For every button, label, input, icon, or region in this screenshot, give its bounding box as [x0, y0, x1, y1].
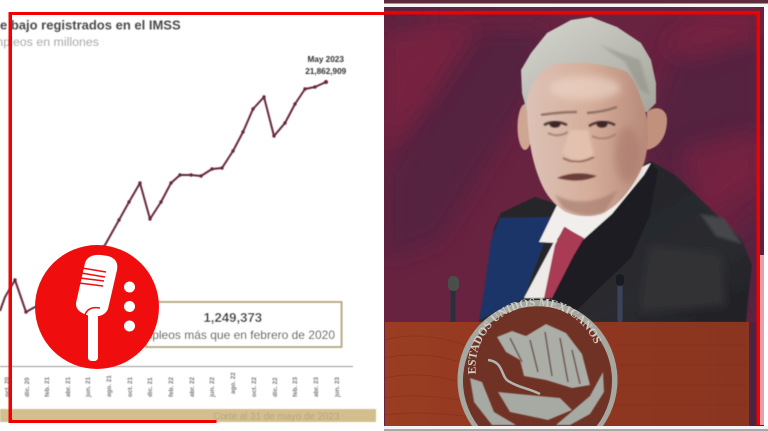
microphone left	[448, 276, 459, 322]
x axis: ago. 22	[230, 372, 237, 394]
panel: chart background	[0, 0, 384, 431]
x axis: feb. 23	[292, 377, 299, 397]
line chart	[0, 80, 328, 314]
wreath	[470, 372, 604, 425]
x axis: ago. 21	[106, 375, 113, 397]
x axis: oct. 22	[251, 377, 258, 397]
tie	[544, 227, 584, 298]
x axis: dic. 21	[147, 377, 154, 397]
cheek shade	[615, 127, 641, 183]
last point label: 21,862,909	[305, 67, 347, 76]
mouth	[557, 173, 597, 181]
dark lapel	[552, 163, 658, 312]
callout box	[136, 302, 342, 347]
eyes	[544, 121, 615, 128]
suit highlight	[700, 214, 742, 244]
x axis: dic. 20	[24, 377, 31, 397]
x axis	[0, 366, 353, 398]
x axis: abr. 21	[65, 377, 72, 397]
microphone right	[616, 274, 624, 322]
brows	[541, 107, 617, 115]
x axis: abr. 22	[189, 377, 196, 397]
x axis: jun. 22	[209, 377, 216, 398]
x axis: jun. 21	[85, 377, 92, 398]
right ear	[646, 108, 667, 150]
x axis: jun. 23	[334, 377, 341, 398]
eagle feather shading	[510, 332, 580, 384]
last point label	[305, 55, 347, 76]
left ear	[518, 104, 532, 150]
last point label: May 2023	[307, 55, 344, 64]
person	[479, 17, 752, 322]
nose	[562, 130, 594, 160]
suit	[479, 161, 752, 322]
serpent	[488, 360, 540, 394]
x axis: feb. 21	[44, 377, 51, 397]
x axis: oct. 21	[127, 377, 134, 397]
x axis: oct. 20	[4, 377, 11, 397]
mic grille	[79, 268, 106, 286]
hair shadow	[600, 45, 650, 95]
photo edges	[384, 0, 768, 431]
mic body	[76, 255, 117, 316]
chin shadow	[555, 190, 618, 215]
face	[527, 63, 648, 216]
footer band: Corte al 31 de mayo de 2023	[213, 412, 340, 422]
lectern	[385, 322, 749, 426]
footer band	[0, 409, 376, 422]
chart title: e bajo registrados en el IMSS	[0, 18, 181, 32]
callout box: 1,249,373	[203, 310, 262, 325]
icon: microphone badge	[35, 245, 159, 369]
mic handle	[88, 309, 98, 361]
seal: ESTADOS UNIDOS MEXICANOS	[468, 298, 602, 374]
blue lapel side	[479, 215, 554, 320]
panel: photo	[384, 0, 768, 431]
seal	[458, 298, 618, 426]
photo background	[384, 7, 768, 426]
shirt front	[524, 240, 570, 298]
x axis: abr. 23	[313, 377, 320, 397]
eagle	[497, 324, 590, 388]
callout box: empleos más que en febrero de 2020	[136, 328, 335, 342]
dark left shoulder	[498, 197, 555, 218]
collar	[539, 163, 651, 243]
x axis: feb. 22	[168, 377, 175, 397]
dots	[124, 282, 135, 332]
eye bags	[548, 132, 616, 139]
panel: chart	[0, 18, 376, 422]
suit sheen	[640, 245, 725, 312]
nose underside	[563, 157, 594, 162]
x axis: dic. 22	[272, 377, 279, 397]
hair	[521, 17, 656, 112]
forehead highlight	[549, 76, 621, 100]
